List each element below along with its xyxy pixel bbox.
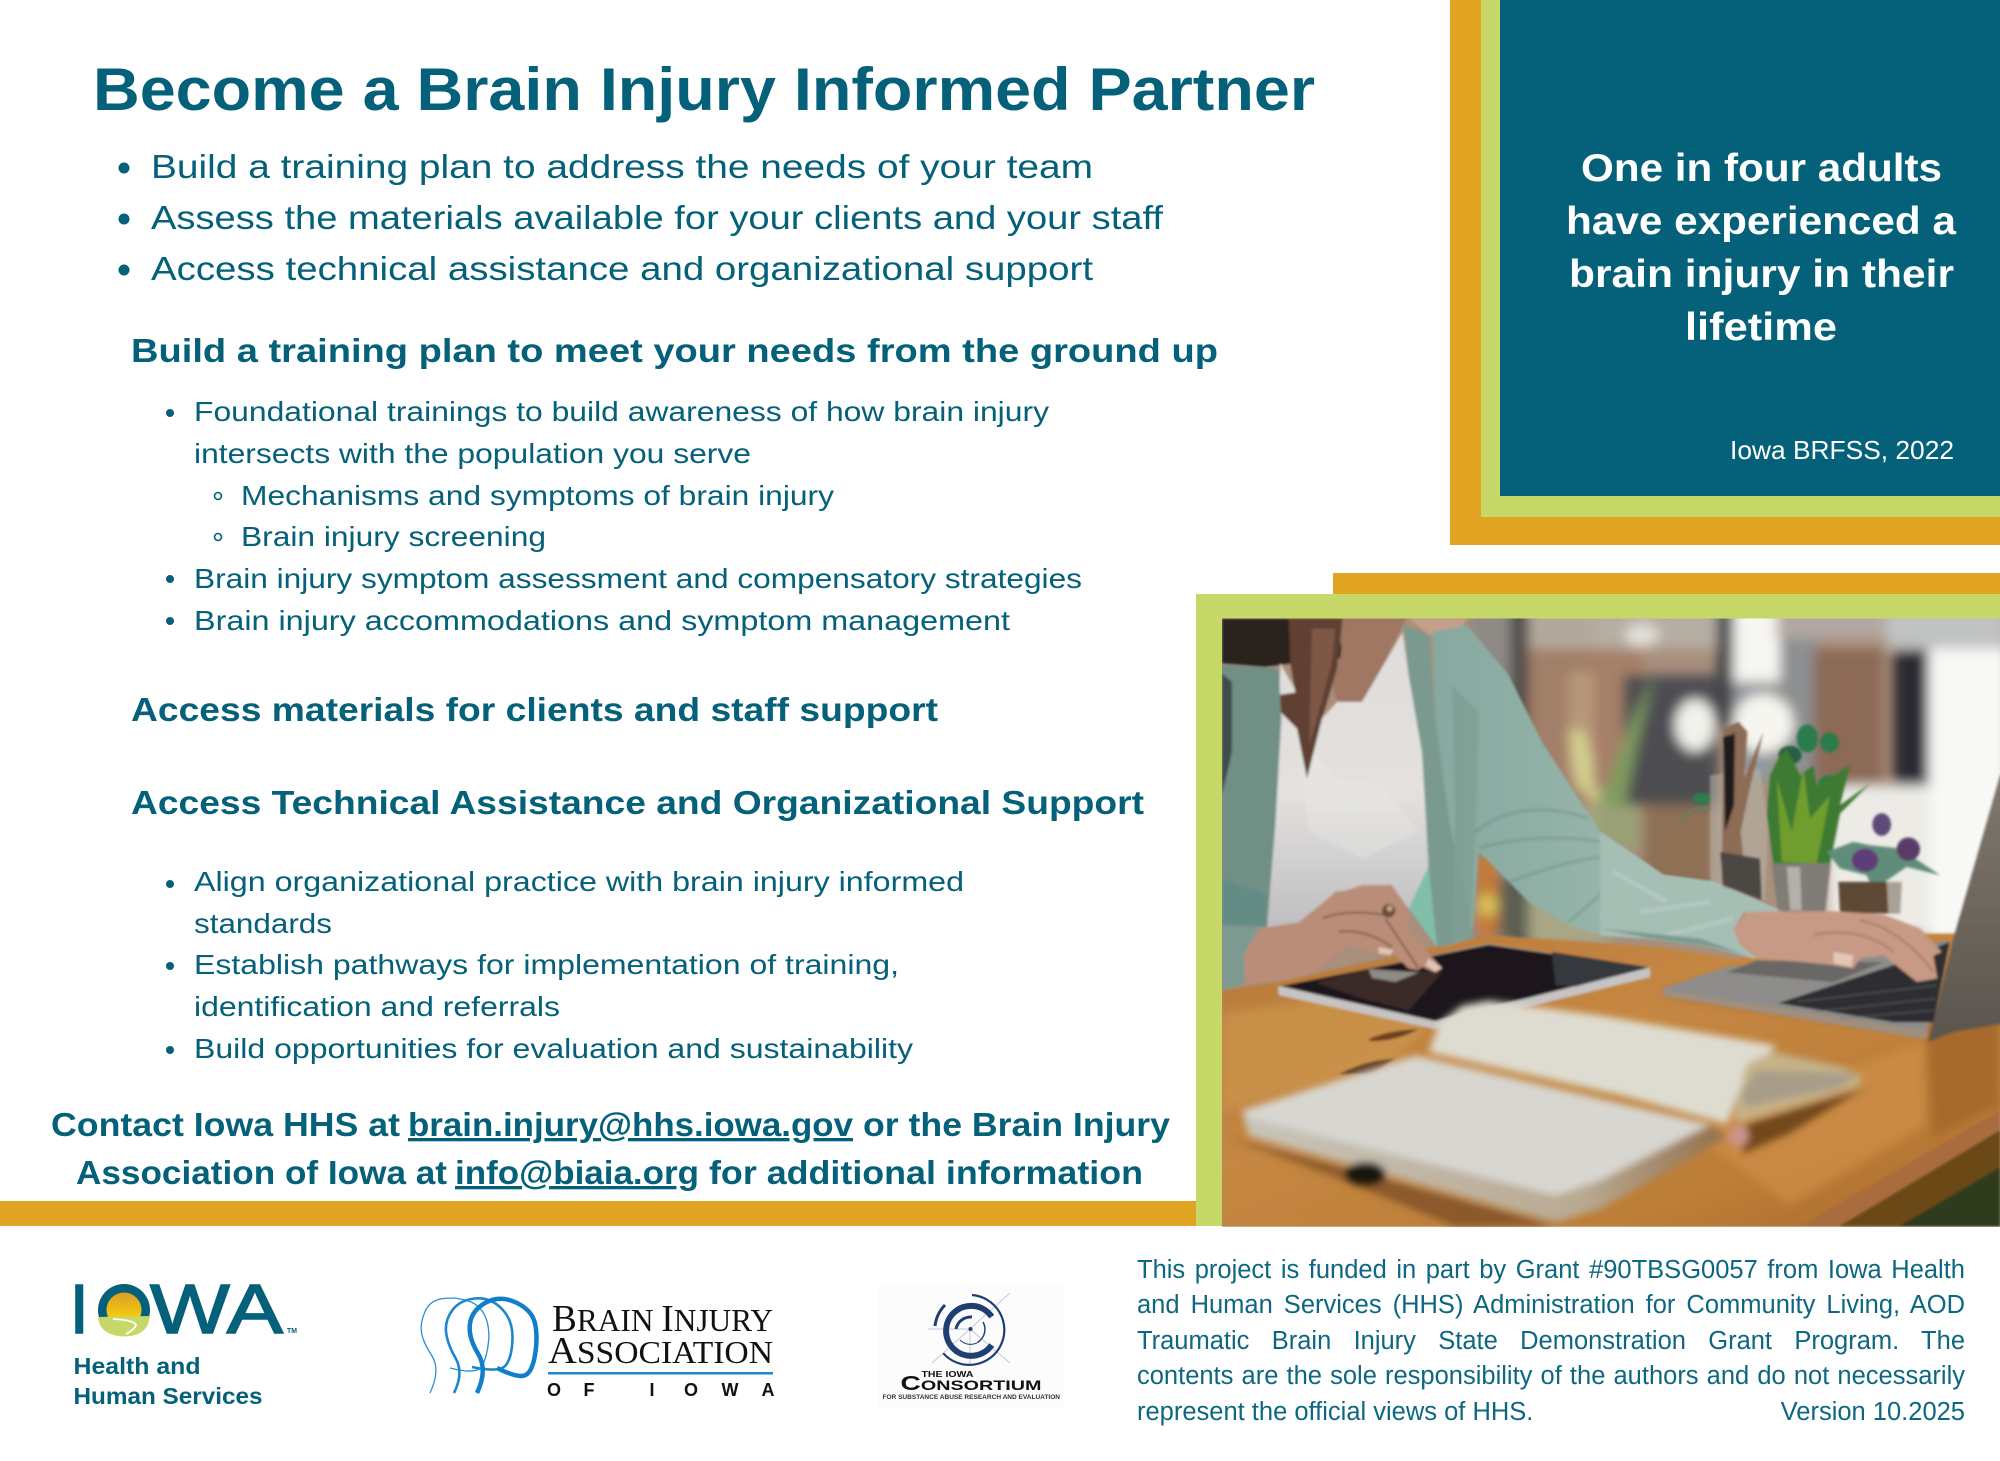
- left cardigan: [1222, 665, 1281, 926]
- logo: Iowa Health and Human Services: TM: [287, 1326, 297, 1335]
- training plan list: intersects with the population you serve: [194, 438, 751, 469]
- contact information: info@biaia.org: [455, 1154, 699, 1191]
- funding statement: Version 10.2025: [1781, 1398, 1965, 1426]
- laptop: [1928, 775, 2000, 1042]
- training plan list: Mechanisms and symptoms of brain injury: [241, 480, 834, 511]
- intro bullet list: Access technical assistance and organizational support: [151, 250, 1093, 287]
- logo: Iowa Health and Human Services: [70, 1270, 297, 1409]
- heading: access materials: Access materials for clients and staff support: [131, 691, 938, 728]
- technical assistance list: Establish pathways for implementation of training,: [194, 949, 899, 980]
- photo: person working at a laptop and tablet: [1222, 605, 2000, 1227]
- heading: technical assistance: Access Technical Assistance and Organizational Support: [131, 784, 1144, 821]
- technical assistance list: Align organizational practice with brain injury informed: [194, 866, 964, 897]
- funding statement: This project is funded in part by Grant #90TBSG0057 from Iowa Health: [1137, 1256, 1965, 1284]
- panel: statistic callout frame: [1450, 0, 2000, 545]
- logo: Brain Injury Association of Iowa: [421, 1298, 774, 1400]
- plant: [1797, 725, 1818, 753]
- metal pot: [1772, 864, 1831, 913]
- contact information: for additional information: [709, 1154, 1143, 1191]
- logo: Iowa Health and Human Services: I: [70, 1270, 89, 1348]
- sleeve cuff: [1600, 832, 1783, 959]
- callout: one in four adults: brain injury in their: [1569, 253, 1954, 296]
- table: [1222, 934, 2000, 1227]
- training plan list: Foundational trainings to build awareness of how brain injury: [194, 396, 1049, 427]
- funding statement: contents are the sole responsibility of the authors and do not necessarily: [1137, 1362, 1965, 1390]
- technical assistance list: [166, 866, 964, 1064]
- contact information: [51, 1106, 1171, 1191]
- contact information: brain.injury@hhs.iowa.gov: [408, 1106, 854, 1143]
- hair strand: [1278, 618, 1344, 778]
- heading: build a training plan: Build a training plan to meet your needs from the ground up: [131, 332, 1218, 369]
- blurred cafe background: [1469, 605, 2000, 952]
- technical assistance list: identification and referrals: [194, 991, 560, 1022]
- teal under layer: [1408, 868, 1438, 947]
- intro bullet list: Assess the materials available for your clients and your staff: [151, 199, 1164, 236]
- logo: The Iowa Consortium: C ONSORTIUM: [900, 1373, 1042, 1395]
- funding statement: Traumatic Brain Injury State Demonstration Grant Program. The: [1137, 1326, 1965, 1354]
- pencil jar: [1710, 769, 1768, 900]
- intro bullet list: Build a training plan to address the needs of your team: [151, 148, 1093, 185]
- callout: one in four adults: One in four adults: [1581, 147, 1942, 190]
- left hand: [1244, 885, 1442, 984]
- logo: The Iowa Consortium: FOR SUBSTANCE ABUSE RESEARCH AND EVALUATION: [882, 1394, 1060, 1401]
- logo: Iowa Health and Human Services: Human Services: [74, 1383, 262, 1409]
- shirt: [1267, 632, 1429, 928]
- logo: The Iowa Consortium: THE IOWA: [922, 1369, 974, 1379]
- callout: one in four adults: [1566, 147, 1956, 349]
- callout: one in four adults: have experienced a: [1566, 200, 1956, 243]
- logo: Brain Injury Association of Iowa: ASSOCIATION: [548, 1330, 773, 1372]
- training plan list: [166, 396, 1082, 636]
- funding statement: represent the official views of HHS.: [1137, 1398, 1533, 1426]
- contact information: or the Brain Injury: [863, 1106, 1171, 1143]
- title: Become a Brain Injury Informed Partner: [93, 56, 1315, 123]
- training plan list: Brain injury screening: [241, 521, 546, 552]
- training plan list: Brain injury symptom assessment and compensatory strategies: [194, 563, 1082, 594]
- notebook (out of focus): [1229, 1001, 1865, 1227]
- logo: Iowa Health and Human Services: Health and: [74, 1353, 200, 1379]
- callout: one in four adults: lifetime: [1685, 306, 1837, 349]
- contact information: Contact Iowa HHS at: [51, 1106, 400, 1143]
- logo: Iowa Health and Human Services: WA: [150, 1270, 283, 1348]
- tablet: [1278, 944, 1650, 1029]
- sleeve and cardigan front: [1429, 625, 1783, 959]
- technical assistance list: Build opportunities for evaluation and sustainability: [194, 1033, 913, 1064]
- intro bullet list: [118, 148, 1164, 287]
- neck: [1332, 618, 1406, 702]
- logo: Brain Injury Association of Iowa: OF IOWA: [547, 1380, 774, 1400]
- funding statement: [1137, 1256, 1965, 1426]
- accent bars: [0, 573, 2000, 1226]
- source note: Iowa BRFSS, 2022: [1730, 435, 1954, 465]
- technical assistance list: standards: [194, 908, 332, 939]
- logo: Brain Injury Association of Iowa: BRAIN INJURY: [552, 1298, 773, 1340]
- small purple plant: [1826, 840, 1940, 884]
- logo: The Iowa Consortium: [878, 1286, 1063, 1408]
- hair: [1222, 618, 1345, 667]
- funding statement: and Human Services (HHS) Administration for Community Living, AOD: [1137, 1291, 1965, 1319]
- training plan list: Brain injury accommodations and symptom management: [194, 605, 1010, 636]
- desk items and laptop: [1600, 722, 2000, 1042]
- contact information: Association of Iowa at: [76, 1154, 447, 1191]
- right hand: [1733, 911, 1942, 982]
